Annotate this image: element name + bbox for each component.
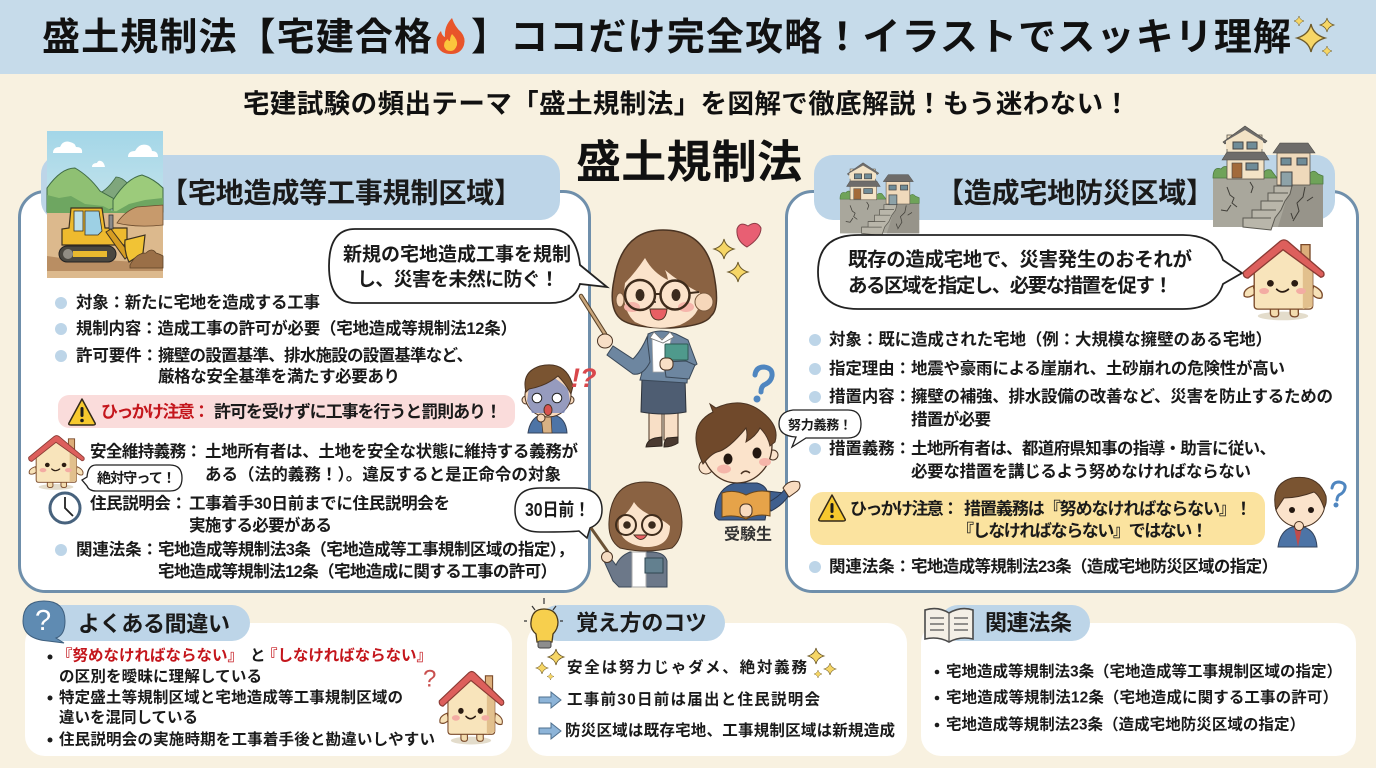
speech bubble: existing developed land: ある区域を指定し、必要な措置を促す！ bbox=[848, 275, 1173, 297]
panel: 造成宅地防災区域 bbox=[786, 126, 1358, 592]
speech bubble: 努力義務: 努力義務！ bbox=[788, 418, 852, 432]
list: 措置内容: 措置が必要 bbox=[911, 409, 991, 429]
text block: related articles: 宅地造成等規制法23条（造成宅地防災区域の指定） bbox=[946, 714, 1305, 734]
panel heading pill bbox=[814, 155, 1335, 220]
text block: related articles: 宅地造成等規制法12条（宅地造成に関する工事の許可） bbox=[946, 688, 1338, 706]
list: 許可要件: 許可要件： bbox=[76, 345, 158, 365]
arrow line: 30 days before: 工事前30日前は届出と住民説明会 bbox=[567, 690, 820, 708]
list: 関連法条: 関連法条： bbox=[76, 539, 158, 559]
callout: trap warning bbox=[810, 492, 1265, 545]
text block: related articles bbox=[935, 662, 1342, 734]
icon: question mark bbox=[755, 367, 772, 392]
list: 措置内容: 擁壁の補強、排水設備の改善など、災害を防止するための bbox=[911, 386, 1333, 406]
text block: 安全維持義務 bbox=[90, 441, 578, 484]
title banner: 】ココだけ完全攻略！イラストでスッキリ理解 bbox=[471, 17, 1291, 59]
center heading: 盛土規制法 bbox=[576, 136, 802, 188]
heading pill bbox=[37, 605, 250, 641]
illustration: small houses on cracked slope bbox=[840, 163, 919, 236]
text block: related articles: 宅地造成等規制法3条（宅地造成等工事規制区域の指定） bbox=[946, 662, 1342, 680]
icon: flame bbox=[436, 18, 465, 54]
text block: 住民説明会 bbox=[90, 493, 450, 535]
character: confused student with book bbox=[696, 367, 800, 544]
text block: common mistakes: 住民説明会の実施時期を工事着手後と勘違いしやすい bbox=[59, 730, 435, 748]
character: thinking student bbox=[1275, 477, 1345, 547]
list: 措置義務: 措置義務： bbox=[829, 439, 911, 458]
list: 関連法条: 宅地造成等規制法3条（宅地造成等工事規制区域の指定）， bbox=[158, 539, 574, 559]
heading pill: よくある間違い bbox=[78, 612, 230, 636]
speech bubble: existing developed land: 既存の造成宅地で、災害発生のおそれが bbox=[848, 248, 1192, 271]
icon: sparkles bbox=[1294, 16, 1334, 56]
icon: open book bbox=[925, 609, 973, 642]
callout: trap warning bbox=[58, 395, 515, 428]
text block: common mistakes: 特定盛土等規制区域と宅地造成等工事規制区域の bbox=[59, 688, 403, 706]
illustration: bulldozer at a construction site bbox=[47, 131, 163, 278]
callout: trap warning: 『しなければならない』ではない！ bbox=[957, 522, 1208, 540]
text line with sparkles: 安全は努力じゃダメ、絶対義務 bbox=[567, 658, 807, 676]
list: 関連法条: 宅地造成等規制法23条（造成宅地防災区域の指定） bbox=[911, 556, 1278, 576]
callout: trap warning: ひっかけ注意： bbox=[101, 402, 210, 422]
text block: common mistakes bbox=[48, 646, 435, 748]
speech bubble: 絶対守って: 絶対守って！ bbox=[97, 470, 176, 486]
list: 許可要件: 擁壁の設置基準、排水施設の設置基準など、 bbox=[158, 345, 473, 365]
panel heading pill: 【宅地造成等工事規制区域】 bbox=[160, 178, 522, 208]
heading pill bbox=[940, 605, 1090, 641]
text block: common mistakes: 『努めなければならない』 bbox=[57, 646, 243, 664]
text block: 住民説明会: 工事着手30日前までに住民説明会を bbox=[189, 493, 450, 513]
text block: common mistakes: と bbox=[250, 646, 266, 664]
icon: warning triangle bbox=[819, 495, 845, 521]
speech bubble: 絶対守って bbox=[82, 465, 182, 491]
speech bubble: 30日前 bbox=[515, 488, 602, 538]
list: 対象: 対象：既に造成された宅地（例：大規模な擁壁のある宅地） bbox=[829, 329, 1272, 349]
illustration: large houses on cracked slope bbox=[1213, 126, 1323, 230]
list: 許可要件 bbox=[55, 345, 473, 386]
list: 措置義務: 土地所有者は、都道府県知事の指導・助言に従い、 bbox=[911, 439, 1276, 458]
icon: house character waving bbox=[1243, 240, 1324, 320]
arrow line: zones: 防災区域は既存宅地、工事規制区域は新規造成 bbox=[565, 720, 895, 740]
list: 対象: 対象：新たに宅地を造成する工事 bbox=[76, 292, 320, 312]
list: 措置義務: 必要な措置を講じるよう努めなければならない bbox=[911, 462, 1251, 481]
icons: stars bbox=[714, 239, 748, 282]
text block: 安全維持義務: 安全維持義務： bbox=[90, 441, 202, 461]
text block: common mistakes: 『しなければならない』 bbox=[262, 646, 432, 664]
icon: question bubble: ? bbox=[35, 605, 51, 637]
text block: common mistakes: 違いを混同している bbox=[59, 708, 198, 726]
panel: よくある間違い bbox=[23, 601, 512, 756]
callout: trap warning: 措置義務は『努めなければならない』！ bbox=[964, 500, 1252, 518]
list: 許可要件: 厳格な安全基準を満たす必要あり bbox=[158, 366, 400, 386]
list: 規制内容: 規制内容：造成工事の許可が必要（宅地造成等規制法12条） bbox=[76, 318, 517, 338]
title banner: 盛土規制法【宅建合格 bbox=[42, 17, 432, 59]
heading pill bbox=[540, 605, 725, 641]
speech bubble: teacher on new works: 新規の宅地造成工事を規制 bbox=[343, 242, 571, 266]
list: 指定理由: 指定理由： bbox=[829, 359, 911, 378]
heading pill: 関連法条 bbox=[985, 610, 1072, 636]
icon: clock bbox=[50, 493, 80, 523]
speech bubble: 努力義務 bbox=[779, 410, 861, 447]
callout: trap warning: 許可を受けずに工事を行うと罰則あり！ bbox=[214, 402, 502, 422]
callout: trap warning: ひっかけ注意： bbox=[850, 500, 959, 518]
list: 措置内容 bbox=[809, 386, 1333, 429]
character: shocked student bbox=[522, 363, 596, 433]
icon: question bubble bbox=[23, 601, 65, 643]
list: 措置義務 bbox=[809, 439, 1276, 481]
panel heading pill: 【造成宅地防災区域】 bbox=[936, 178, 1214, 208]
speech bubble: 30日前: 30日前！ bbox=[525, 500, 590, 520]
list: 措置内容: 措置内容： bbox=[829, 386, 911, 406]
text block: common mistakes: の区別を曖昧に理解している bbox=[59, 668, 262, 686]
icon: house character bbox=[29, 436, 84, 490]
speech bubble: teacher on new works: し、災害を未然に防ぐ！ bbox=[357, 268, 559, 290]
icon: warning triangle bbox=[69, 399, 95, 425]
icon: question mark: ? bbox=[423, 666, 436, 692]
speech bubble: teacher on new works bbox=[329, 229, 607, 303]
panel: 関連法条 bbox=[921, 605, 1356, 756]
panel: 宅地造成等工事規制区域 bbox=[20, 131, 607, 592]
icon: surprise marks: !? bbox=[571, 363, 596, 393]
text block: 安全維持義務: ある（法的義務！）。違反すると是正命令の対象 bbox=[205, 464, 561, 484]
character: small teacher bbox=[591, 482, 682, 587]
heading pill: 覚え方のコツ bbox=[576, 610, 707, 636]
text block: 住民説明会: 住民説明会： bbox=[90, 494, 187, 513]
icon: heart bbox=[737, 223, 761, 247]
label: 受験生: 受験生 bbox=[724, 524, 772, 544]
speech bubble: existing developed land bbox=[818, 235, 1242, 309]
text line with sparkles bbox=[536, 648, 836, 680]
character: teacher with pointer bbox=[581, 223, 761, 447]
list: 指定理由: 地震や豪雨による崖崩れ、土砂崩れの危険性が高い bbox=[911, 358, 1285, 378]
text block: 安全維持義務: 土地所有者は、土地を安全な状態に維持する義務が bbox=[205, 441, 578, 461]
list: 関連法条: 関連法条： bbox=[829, 556, 911, 576]
title banner bbox=[0, 0, 1376, 74]
panel: 覚え方のコツ bbox=[524, 598, 907, 756]
list: 関連法条 bbox=[55, 539, 574, 581]
subtitle: 宅建試験の頻出テーマ「盛土規制法」を図解で徹底解説！もう迷わない！ bbox=[243, 89, 1130, 119]
list: 関連法条: 宅地造成等規制法12条（宅地造成に関する工事の許可） bbox=[158, 561, 557, 581]
icon: house character with question bbox=[439, 672, 504, 744]
text block: 住民説明会: 実施する必要がある bbox=[189, 515, 332, 535]
icon: light bulb bbox=[524, 598, 563, 648]
panel heading pill bbox=[41, 155, 560, 220]
